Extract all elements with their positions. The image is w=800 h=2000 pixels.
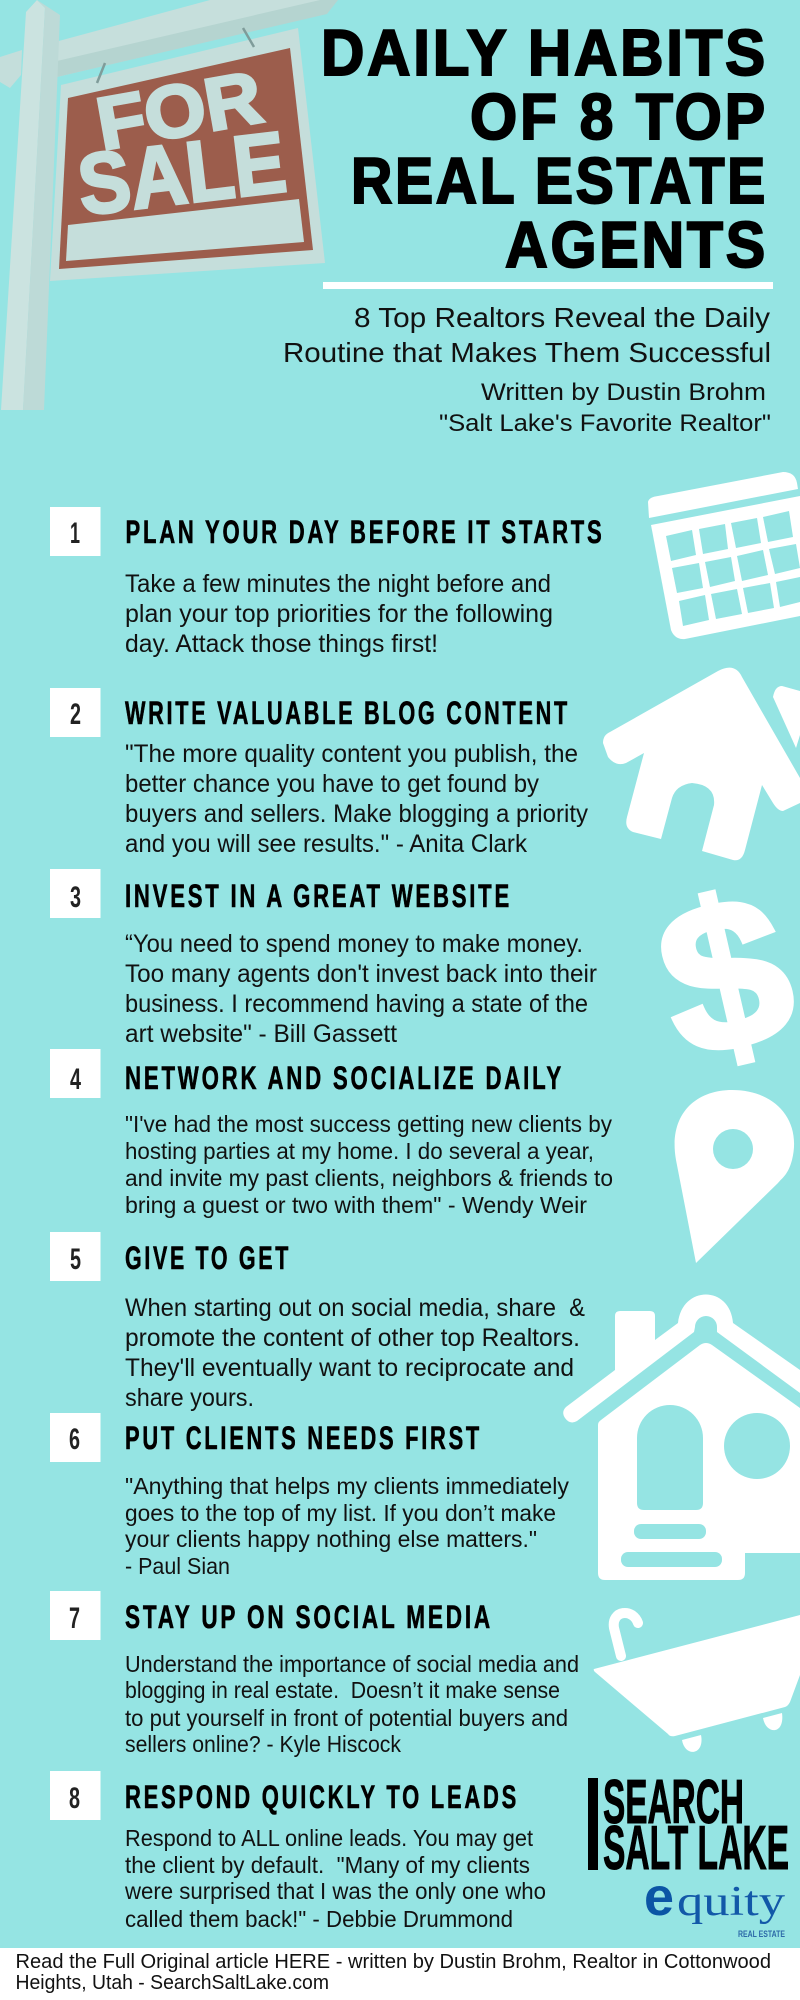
author byline: "Salt Lake's Favorite Realtor"	[439, 410, 771, 437]
habit 1: Take a few minutes the night before and	[125, 570, 551, 598]
habit 7	[50, 1591, 579, 1757]
habit 2: better chance you have to get found by	[125, 770, 539, 798]
subtitle: Routine that Makes Them Successful	[283, 337, 771, 368]
habit 4: bring a guest or two with them" - Wendy Weir	[125, 1192, 587, 1218]
habit 5: GIVE TO GET	[125, 1240, 291, 1276]
habit 7: STAY UP ON SOCIAL MEDIA	[125, 1599, 493, 1635]
habit 3: 3	[70, 881, 81, 914]
habit 2: buyers and sellers. Make blogging a priority	[125, 800, 588, 828]
for sale sign illustration: SALE	[73, 114, 291, 234]
subtitle	[283, 302, 771, 368]
logo: Equity Real Estate: e	[644, 1867, 674, 1927]
habit 4	[50, 1049, 613, 1218]
habit 5	[50, 1232, 585, 1412]
habit 5: share yours.	[125, 1384, 254, 1412]
habit 6	[50, 1413, 569, 1579]
habit 3: business. I recommend having a state of the	[125, 990, 588, 1018]
habit 8: Respond to ALL online leads. You may get	[125, 1825, 534, 1851]
icon: location pin	[675, 1090, 794, 1263]
habit 6: PUT CLIENTS NEEDS FIRST	[125, 1420, 482, 1456]
habit 5: When starting out on social media, share &	[125, 1294, 585, 1322]
habit 2: and you will see results." - Anita Clark	[125, 830, 527, 858]
habit 3	[50, 869, 597, 1048]
title: AGENTS	[505, 208, 768, 281]
habit 6: 6	[69, 1423, 80, 1456]
habit 1: 1	[70, 517, 80, 550]
habit 8: were surprised that I was the only one who	[124, 1878, 546, 1904]
habit 1: day. Attack those things first!	[125, 630, 438, 658]
icon: calendar	[648, 472, 800, 639]
icon: bathtub	[594, 1613, 800, 1752]
logo: Equity Real Estate	[644, 1867, 785, 1939]
habit 2: WRITE VALUABLE BLOG CONTENT	[125, 695, 570, 731]
habit 3: art website" - Bill Gassett	[125, 1020, 397, 1048]
for sale sign illustration	[0, 0, 338, 410]
habit 2: "The more quality content you publish, the	[125, 740, 578, 768]
habit 7: to put yourself in front of potential buyers and	[125, 1705, 568, 1731]
habit 6: - Paul Sian	[125, 1553, 230, 1579]
icon: tilted house	[603, 668, 800, 860]
habit 3: “You need to spend money to make money.	[125, 930, 583, 958]
subtitle: 8 Top Realtors Reveal the Daily	[354, 302, 770, 333]
title	[321, 16, 768, 281]
habit 5: They'll eventually want to reciprocate and	[125, 1354, 574, 1382]
footer band: Heights, Utah - SearchSaltLake.com	[16, 1972, 329, 1994]
habit 1: PLAN YOUR DAY BEFORE IT STARTS	[126, 514, 604, 550]
habit 2	[50, 688, 588, 858]
habit 5: 5	[70, 1243, 81, 1276]
habit 4: and invite my past clients, neighbors & friends to	[125, 1165, 613, 1191]
habit 7: 7	[69, 1602, 80, 1635]
habit 7: sellers online? - Kyle Hiscock	[125, 1731, 401, 1757]
habit 1: plan your top priorities for the following	[125, 600, 553, 628]
habit 5: promote the content of other top Realtors.	[125, 1324, 580, 1352]
habit 8	[50, 1771, 546, 1932]
habit 4: "I've had the most success getting new clients by	[125, 1111, 612, 1137]
title: DAILY HABITS	[321, 16, 768, 89]
logo: Search Salt Lake	[588, 1768, 789, 1883]
habit 4: hosting parties at my home. I do several a year,	[125, 1138, 594, 1164]
title: OF 8 TOP	[470, 80, 768, 153]
habit 8: called them back!" - Debbie Drummond	[125, 1906, 513, 1932]
habit 3: INVEST IN A GREAT WEBSITE	[125, 878, 512, 914]
for sale sign illustration: FOR	[90, 55, 268, 166]
habit 6: your clients happy nothing else matters."	[125, 1526, 537, 1552]
habit 6: goes to the top of my list. If you don’t make	[125, 1500, 556, 1526]
habit 7: blogging in real estate. Doesn’t it make sense	[125, 1677, 560, 1703]
habit 6: "Anything that helps my clients immediately	[125, 1473, 569, 1499]
author byline: Written by Dustin Brohm	[481, 379, 766, 406]
habit 8: the client by default. "Many of my clients	[125, 1852, 530, 1878]
logo: Equity Real Estate: REAL ESTATE	[738, 1929, 785, 1939]
habit 3: Too many agents don't invest back into their	[125, 960, 597, 988]
habit 1	[50, 507, 604, 658]
habit 8: 8	[69, 1782, 80, 1815]
habit 4: NETWORK AND SOCIALIZE DAILY	[125, 1060, 564, 1096]
footer band: Read the Full Original article HERE - written by Dustin Brohm, Realtor in Cottonwood	[16, 1951, 771, 1973]
habit 4: 4	[70, 1063, 81, 1096]
author byline	[439, 379, 771, 437]
logo: Equity Real Estate: quity	[677, 1879, 785, 1925]
icon: house with chimney	[563, 1294, 800, 1580]
habit 8: RESPOND QUICKLY TO LEADS	[125, 1779, 519, 1815]
habit 7: Understand the importance of social media and	[125, 1651, 579, 1677]
footer band	[0, 1948, 800, 2000]
habit 2: 2	[70, 698, 81, 731]
